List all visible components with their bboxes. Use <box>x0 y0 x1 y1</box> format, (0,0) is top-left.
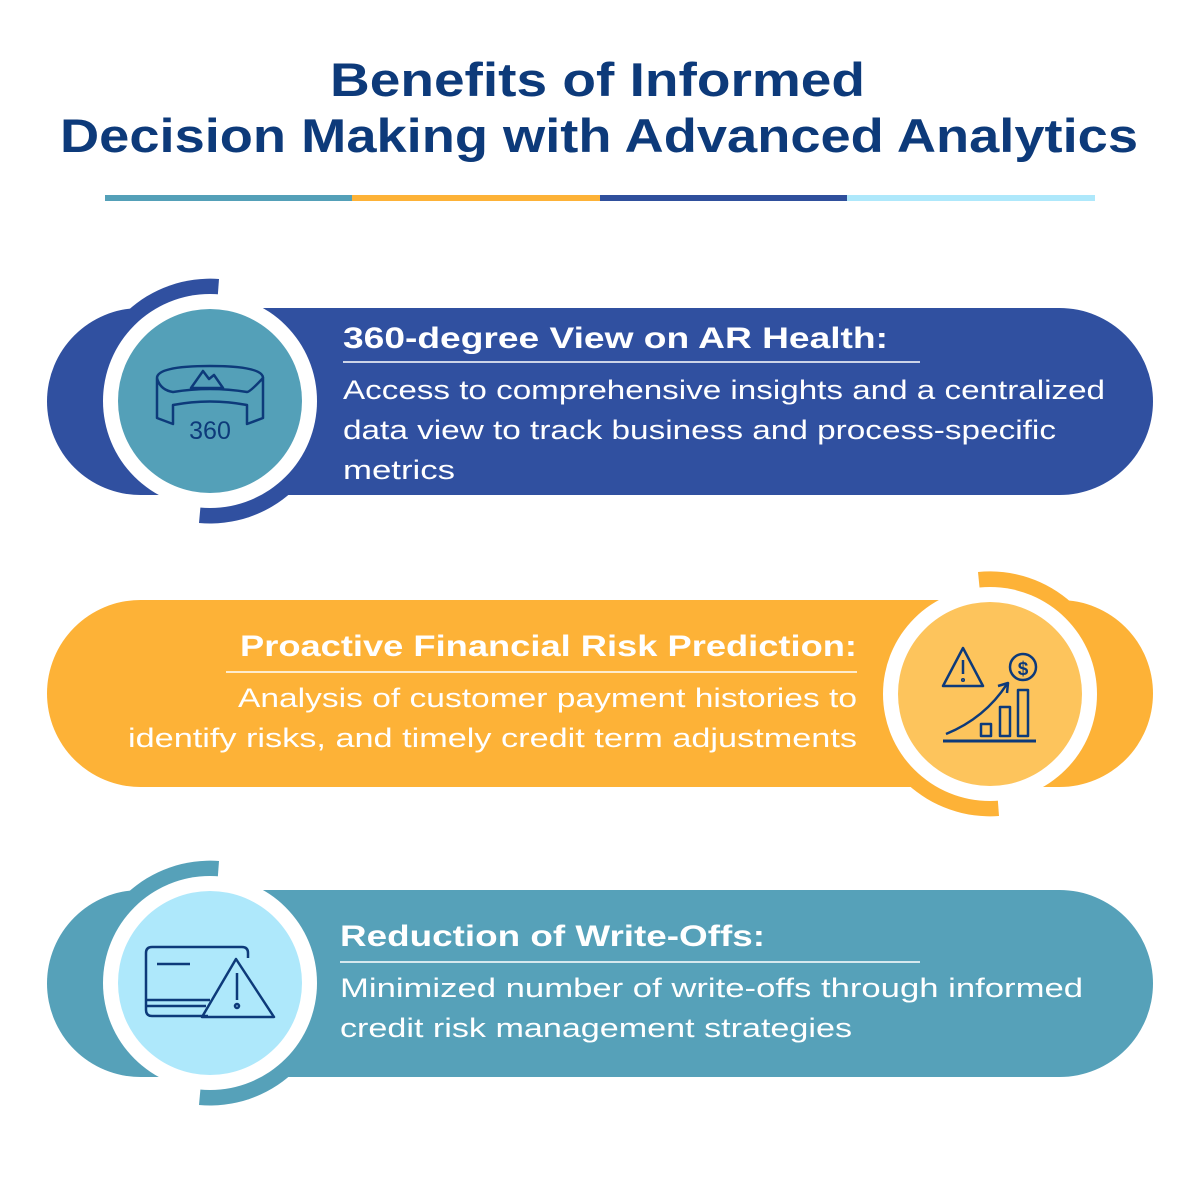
body text: Analysis of customer payment histories to <box>238 683 857 713</box>
body text <box>343 375 1105 485</box>
body text <box>340 973 1083 1043</box>
panel: reduction of write-offs <box>47 861 1153 1105</box>
body text: Access to comprehensive insights and a centralized <box>343 375 1105 405</box>
title underline <box>105 195 1095 201</box>
title: Benefits of Informed <box>330 53 865 106</box>
heading: Reduction of Write-Offs: <box>340 920 765 953</box>
body text: data view to track business and process-specific <box>343 415 1056 445</box>
icon: risk chart: $ <box>1018 659 1029 680</box>
icon: 360 view <box>157 366 263 445</box>
body text <box>128 683 857 753</box>
icon: 360 view: 360 <box>189 417 231 445</box>
body text: credit risk management strategies <box>340 1013 852 1043</box>
heading: 360-degree View on AR Health: <box>343 322 888 355</box>
title: Decision Making with Advanced Analytics <box>60 109 1138 162</box>
body text: Minimized number of write-offs through informed <box>340 973 1083 1003</box>
body text: identify risks, and timely credit term adjustments <box>128 723 857 753</box>
icon: risk chart <box>943 648 1036 741</box>
panel: proactive risk prediction <box>47 571 1153 816</box>
title <box>60 53 1138 162</box>
panel: 360-degree view <box>47 279 1153 523</box>
body text: metrics <box>343 455 455 485</box>
heading: Proactive Financial Risk Prediction: <box>240 630 857 663</box>
icon: card with warning <box>146 947 274 1017</box>
